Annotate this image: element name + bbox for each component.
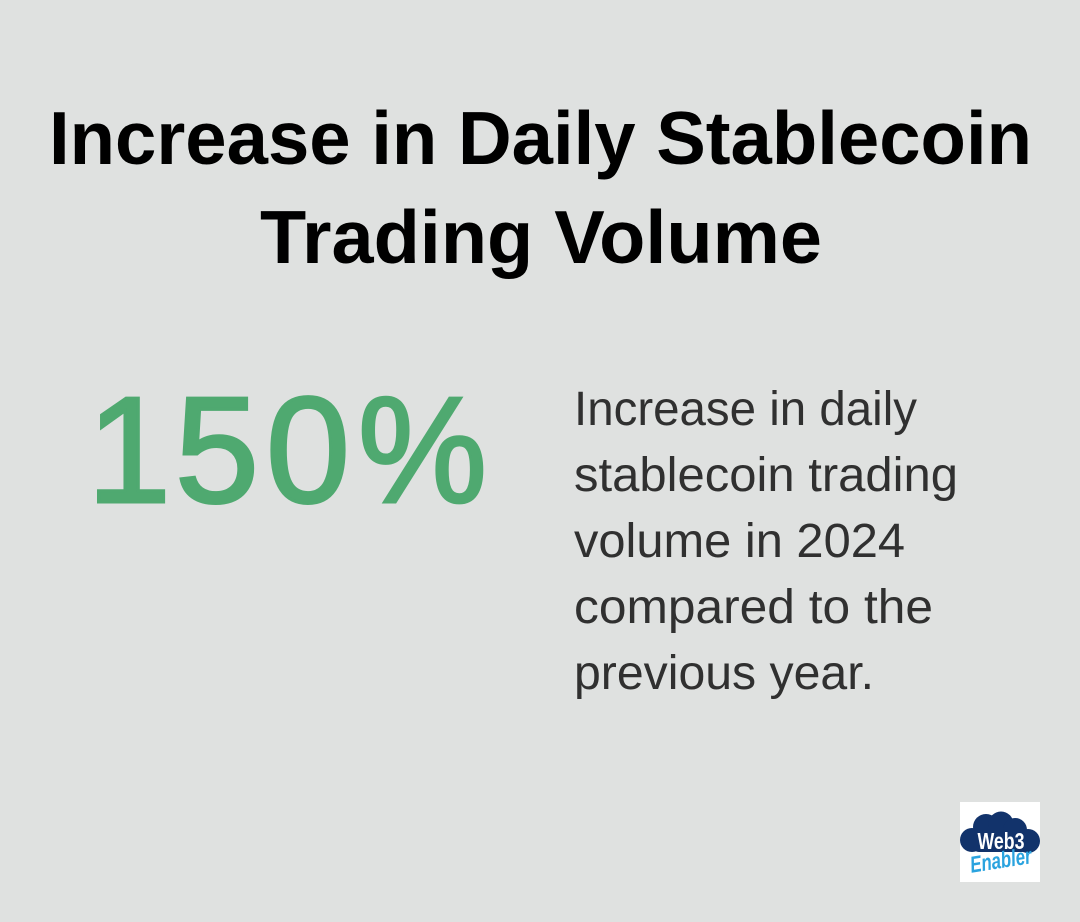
title: Trading Volume — [260, 195, 822, 279]
title — [49, 96, 1032, 279]
description text: previous year. — [574, 647, 874, 700]
title: Increase in Daily Stablecoin — [49, 96, 1032, 180]
logo: Web3 Enabler — [960, 802, 1040, 882]
big stat: 150%: 5 — [175, 365, 259, 534]
description text — [574, 383, 958, 700]
logo wordmark: Web3 — [978, 828, 1024, 854]
description text: Increase in daily — [574, 383, 917, 436]
big stat: 150%: % — [358, 365, 487, 534]
big stat: 150%: 0 — [266, 365, 350, 534]
big stat: 150% — [87, 365, 487, 534]
logo wordmark — [968, 828, 1034, 878]
icon: cloud — [960, 812, 1040, 853]
big stat: 150%: 1 — [87, 365, 171, 534]
logo wordmark: Enabler — [968, 842, 1034, 878]
description text: volume in 2024 — [574, 515, 905, 568]
description text: compared to the — [574, 581, 933, 634]
description text: stablecoin trading — [574, 449, 958, 502]
